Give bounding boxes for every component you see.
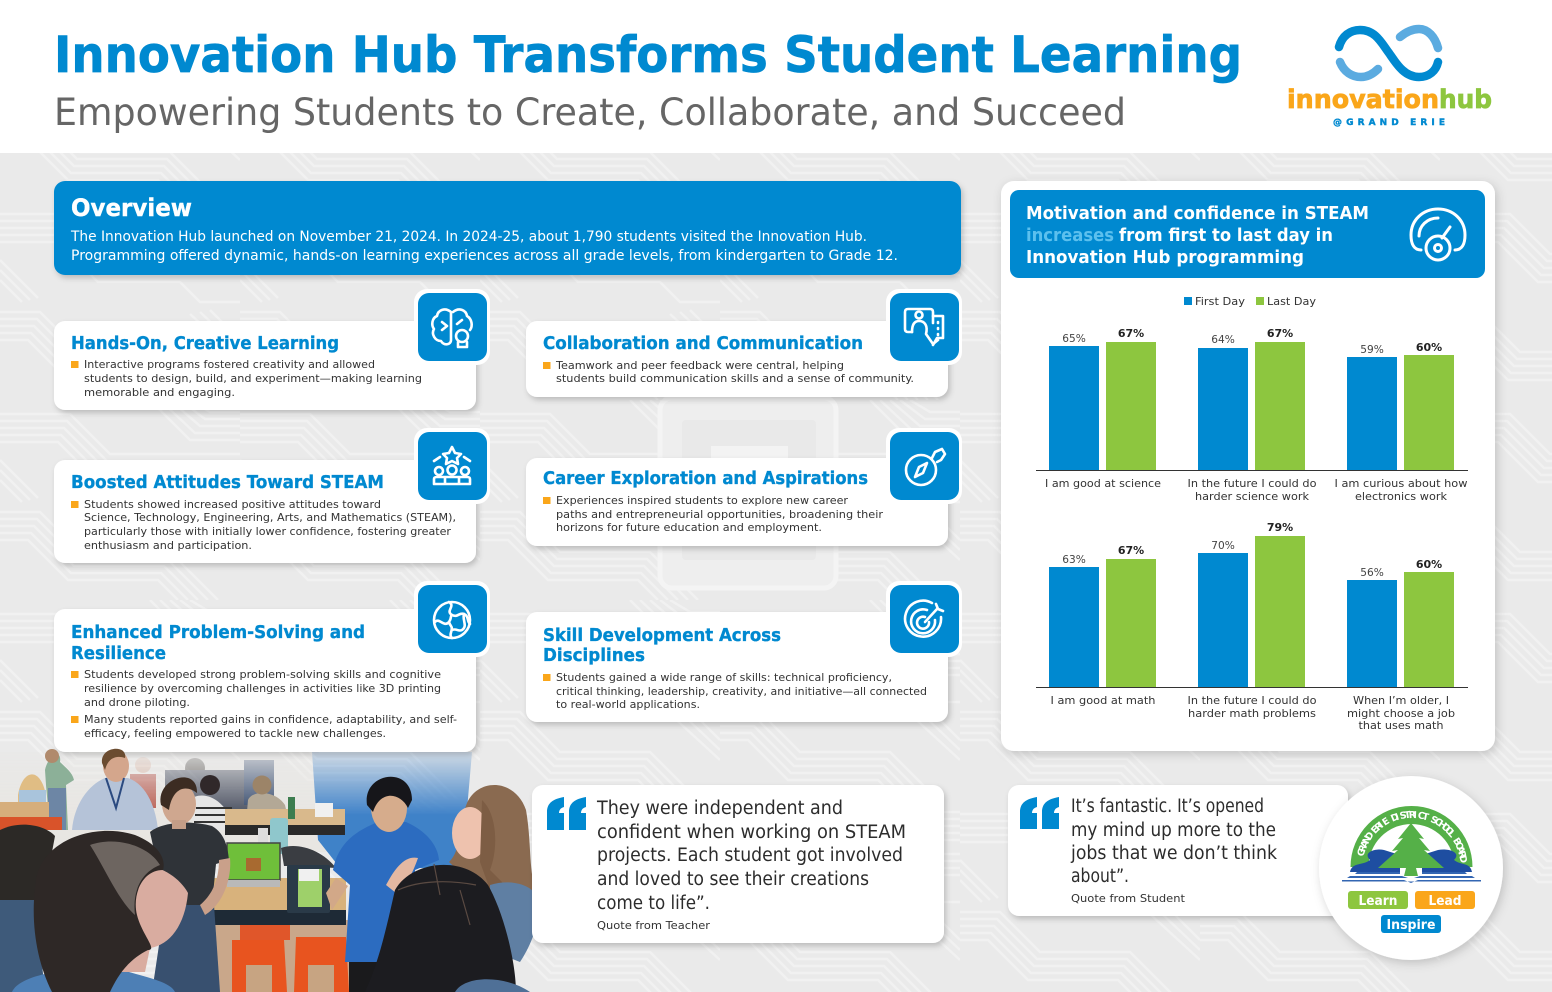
panel: skill development across disciplines: critical thinking, leadership, creativity, and initiative—all connected xyxy=(556,686,927,698)
panel: enhanced problem-solving and resilience: resilience by overcoming challenges in activities like 3D printing xyxy=(84,683,441,695)
panel: enhanced problem-solving and resilience: Resilience xyxy=(71,643,166,664)
table and laptop xyxy=(214,843,346,925)
panel: boosted attitudes toward STEAM: Boosted Attitudes Toward STEAM xyxy=(71,472,384,493)
logo: innovation hub: @GRAND ERIE xyxy=(1333,118,1445,128)
panel: boosted attitudes toward STEAM xyxy=(54,460,476,563)
student with braids xyxy=(365,864,530,992)
panel: boosted attitudes toward STEAM: enthusiasm and participation. xyxy=(84,540,252,552)
bar chart: science and electronics: 65% xyxy=(1062,333,1086,345)
photo: students at the Innovation Hub xyxy=(0,749,540,992)
panel: overview: Overview xyxy=(71,194,192,222)
bar chart: math: I am good at math xyxy=(1050,695,1156,707)
bar chart: math: When I’m older, I xyxy=(1353,695,1449,707)
quote: teacher: Quote from Teacher xyxy=(597,920,711,932)
panel: overview xyxy=(54,181,961,275)
quote: teacher: and loved to see their creations xyxy=(597,869,869,890)
chart header: Innovation Hub programming xyxy=(1026,248,1304,268)
panel: skill development across disciplines: to real-world applications. xyxy=(556,699,700,711)
student with long hair xyxy=(449,785,540,962)
icon: puzzle globe xyxy=(414,581,490,657)
bar chart: science and electronics: 59% xyxy=(1360,344,1384,356)
quote: teacher: They were independent and xyxy=(596,798,843,819)
panel: enhanced problem-solving and resilience: Students developed strong problem-solving skills and cognitive xyxy=(84,669,441,681)
panel: hands-on creative learning: students to design, build, and experiment—making learning xyxy=(84,373,422,385)
icon: group with star xyxy=(414,428,490,504)
bar chart: math: 56% xyxy=(1360,567,1384,579)
icon: chat people xyxy=(886,289,962,365)
icon: quotation mark xyxy=(1020,797,1059,829)
panel: career exploration and aspirations xyxy=(526,458,948,546)
panel: career exploration and aspirations: paths and entrepreneurial opportunities, broadening their xyxy=(556,509,884,521)
panel: skill development across disciplines xyxy=(526,612,948,722)
panel: enhanced problem-solving and resilience xyxy=(54,609,476,752)
bar chart: math xyxy=(1036,521,1468,732)
legend xyxy=(1184,296,1316,308)
student in black tee xyxy=(150,777,230,992)
chart header xyxy=(1010,190,1485,278)
woman in foreground xyxy=(0,825,188,992)
bar chart: math: harder math problems xyxy=(1188,708,1316,720)
bar chart: math: In the future I could do xyxy=(1188,695,1316,707)
chart header: from first to last day in xyxy=(1119,226,1333,246)
quote: teacher: confident when working on STEAM xyxy=(597,822,906,843)
panel: collaboration and communication xyxy=(526,321,948,397)
quote: teacher: come to life”. xyxy=(597,893,710,914)
badge: Grand Erie District School Board: GRAND ERIE DISTRICT SCHOOL BOARD xyxy=(1356,810,1469,864)
chart header: Motivation and confidence in STEAM xyxy=(1026,204,1369,224)
orange stools xyxy=(232,925,349,992)
quote: student: It’s fantastic. It’s opened xyxy=(1071,796,1264,817)
panel: enhanced problem-solving and resilience: Many students reported gains in confidence, adaptability, and self- xyxy=(84,714,457,726)
panel: overview: Programming offered dynamic, hands-on learning experiences across all grade levels, from kindergarten to Grade 12. xyxy=(71,248,898,264)
panel: skill development across disciplines: Students gained a wide range of skills: technical proficiency, xyxy=(556,672,892,684)
panel: enhanced problem-solving and resilience: Enhanced Problem-Solving and xyxy=(71,622,365,643)
panel: skill development across disciplines: Skill Development Across xyxy=(543,625,781,646)
bar chart: math: 70% xyxy=(1211,540,1235,552)
icon: target xyxy=(886,581,962,657)
man in shirt xyxy=(72,749,158,830)
logo: innovation hub: hub xyxy=(1439,85,1492,115)
bar chart: math: 63% xyxy=(1062,554,1086,566)
panel: collaboration and communication: Teamwork and peer feedback were central, helping xyxy=(555,360,844,372)
bar chart: science and electronics: I am curious about how xyxy=(1334,478,1468,490)
floor xyxy=(175,920,353,992)
panel: career exploration and aspirations: horizons for future education and employment. xyxy=(556,522,822,534)
panel: boosted attitudes toward STEAM: Science, Technology, Engineering, Arts, and Mathematics (STEAM), xyxy=(84,512,456,524)
panel: motivation chart xyxy=(1001,181,1495,751)
bar chart: math: 60% xyxy=(1416,558,1442,571)
quote: student xyxy=(1008,785,1348,916)
quote: student: Quote from Student xyxy=(1071,893,1185,905)
panel: hands-on creative learning: memorable and engaging. xyxy=(84,387,235,399)
bar chart: math: 67% xyxy=(1118,544,1144,557)
bar chart: science and electronics xyxy=(1036,327,1468,503)
title: Innovation Hub Transforms Student Learning xyxy=(54,26,1242,84)
panel: overview: The Innovation Hub launched on November 21, 2024. In 2024-25, about 1,790 students visited the Innovation Hub. xyxy=(70,229,867,245)
badge: Grand Erie District School Board: Learn xyxy=(1358,894,1398,909)
bar chart: science and electronics: electronics work xyxy=(1355,491,1448,503)
panel: hands-on creative learning xyxy=(54,321,476,410)
panel: boosted attitudes toward STEAM: Students showed increased positive attitudes toward xyxy=(84,499,381,511)
quote: teacher: projects. Each student got involved xyxy=(597,845,903,866)
bar chart: science and electronics: I am good at science xyxy=(1045,478,1161,490)
panel: collaboration and communication: Collaboration and Communication xyxy=(543,333,863,354)
student in blue tee xyxy=(326,777,439,992)
panel: skill development across disciplines: Disciplines xyxy=(543,645,645,666)
icon: brain xyxy=(414,289,490,365)
legend: Last Day xyxy=(1267,296,1316,308)
quote: teacher xyxy=(532,785,944,943)
badge: Grand Erie District School Board: Lead xyxy=(1428,894,1462,909)
icon: compass xyxy=(886,428,962,504)
bar chart: science and electronics: 67% xyxy=(1267,327,1293,340)
tablet xyxy=(287,865,330,913)
bar chart: science and electronics: 67% xyxy=(1118,327,1144,340)
quote: student: about”. xyxy=(1071,866,1129,887)
subtitle: Empowering Students to Create, Collaborate, and Succeed xyxy=(54,91,1126,134)
bar chart: science and electronics: 60% xyxy=(1416,341,1442,354)
bar chart: math: might choose a job xyxy=(1347,708,1455,720)
bar chart: science and electronics: 64% xyxy=(1211,334,1235,346)
bar chart: math: that uses math xyxy=(1358,720,1444,732)
panel: hands-on creative learning: Interactive programs fostered creativity and allowed xyxy=(84,359,375,371)
panel: hands-on creative learning: Hands-On, Creative Learning xyxy=(71,333,339,354)
logo: innovation hub: innovation xyxy=(1287,85,1439,115)
legend: First Day xyxy=(1195,296,1245,308)
panel: career exploration and aspirations: Career Exploration and Aspirations xyxy=(543,468,868,489)
bar chart: science and electronics: harder science work xyxy=(1195,491,1310,503)
bar chart: science and electronics: In the future I could do xyxy=(1188,478,1316,490)
logo: innovation hub xyxy=(1287,29,1492,128)
badge: Grand Erie District School Board: Inspire xyxy=(1386,918,1436,933)
panel: collaboration and communication: students build communication skills and a sense of community. xyxy=(556,373,914,385)
quote: student: my mind up more to the xyxy=(1071,820,1276,841)
header band xyxy=(0,0,1552,153)
panel: enhanced problem-solving and resilience: efficacy, feeling empowered to tackle new challenges. xyxy=(84,728,386,740)
icon: quotation mark xyxy=(547,797,586,830)
panel: enhanced problem-solving and resilience: and drone piloting. xyxy=(84,697,190,709)
chart header: increases xyxy=(1026,226,1114,246)
quote: student: jobs that we don’t think xyxy=(1070,843,1277,864)
panel: career exploration and aspirations: Experiences inspired students to explore new career xyxy=(556,495,849,507)
panel: boosted attitudes toward STEAM: particularly those with initially lower confidence, fostering greater xyxy=(84,526,452,538)
badge: Grand Erie District School Board xyxy=(1319,776,1503,960)
bar chart: math: 79% xyxy=(1267,521,1293,534)
